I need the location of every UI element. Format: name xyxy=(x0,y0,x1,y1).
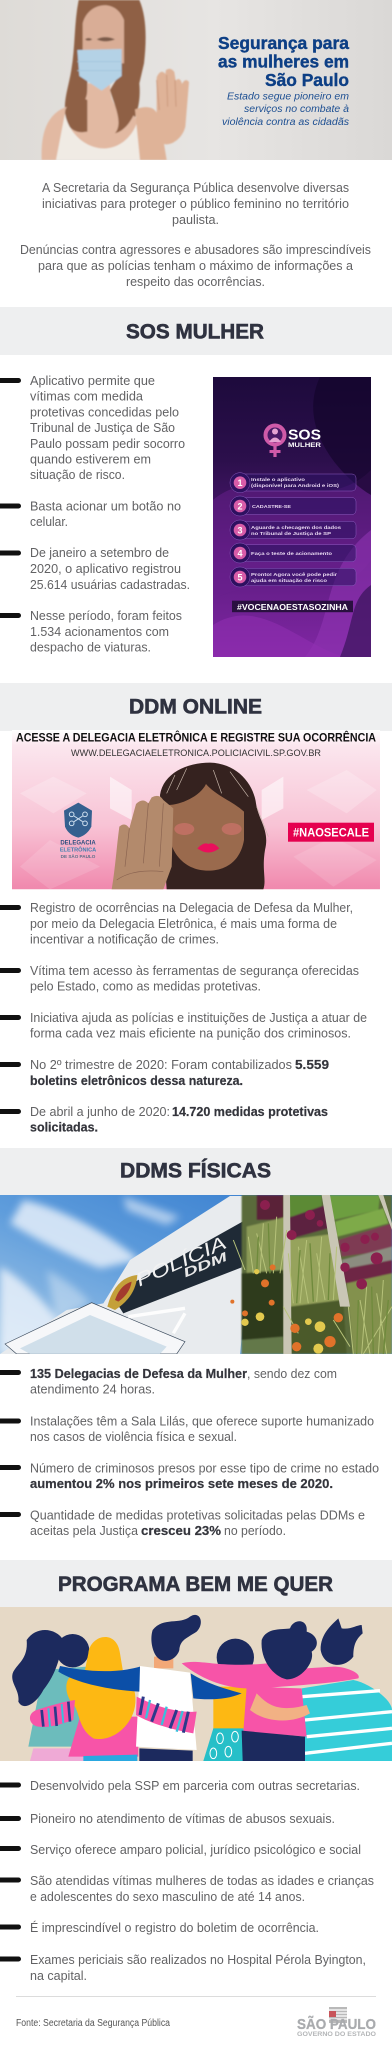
step 3 xyxy=(230,520,356,540)
bullet: registro xyxy=(0,901,353,946)
person 6 xyxy=(302,1618,392,1761)
bullet: exames: na capital. xyxy=(30,1969,87,1983)
banner logo text: ELETRÔNICA xyxy=(60,846,96,854)
bullet: pioneiro: Pioneiro no atendimento de vítimas de abusos sexuais. xyxy=(30,1812,335,1826)
bullet: atendidas: São atendidas vítimas mulheres de todas as idades e crianças xyxy=(30,1874,374,1888)
bullet: atendidas: e adolescentes do sexo masculino de até 14 anos. xyxy=(30,1890,305,1904)
bullet: 135 delegacias xyxy=(0,1367,337,1396)
bullet: medidas protetivas xyxy=(0,1508,365,1538)
photo: police station facade with green wall xyxy=(0,1195,392,1354)
bullet: botão: Basta acionar um botão no xyxy=(30,500,181,514)
banner URL: WWW.DELEGACIAELETRONICA.POLICIACIVIL.SP.GOV.BR xyxy=(71,748,321,758)
person 4 xyxy=(203,1639,254,1761)
DDM Online banner xyxy=(12,730,380,889)
hero subtitle: serviços no combate à xyxy=(244,104,349,115)
person 3 center xyxy=(136,1615,201,1761)
bullet: botão xyxy=(0,500,181,529)
bullet: vítima: pelo Estado, como as medidas protetivas. xyxy=(30,980,261,994)
bullet: aplicativo: protetivas concedidas pelo xyxy=(30,405,179,419)
bullet: acionamentos: 1.534 acionamentos com xyxy=(30,625,169,639)
bullet: acionamentos xyxy=(0,609,182,654)
step 4: Faça o teste de acionamento xyxy=(251,551,332,556)
bullet: medidas protetivas: 14.720 medidas protetivas xyxy=(172,1105,328,1119)
bullet: botão: celular. xyxy=(30,515,68,529)
bullet: sala lilás xyxy=(0,1414,374,1444)
intro text: Denúncias contra agressores e abusadores são imprescindíveis xyxy=(20,243,371,257)
bullet: registro: incentivar a notificação de crimes. xyxy=(30,932,219,946)
hashtag tag xyxy=(288,823,374,842)
person 2 xyxy=(56,1634,138,1761)
Programa Bem Me Quer bullet list xyxy=(0,1779,374,1983)
bullet: iniciativa: forma cada vez mais eficiente na punição dos criminosos. xyxy=(30,1027,351,1041)
step 3: Aguarde a checagem dos dados xyxy=(251,525,342,530)
bullet: medidas protetivas: aceitas pela Justiça xyxy=(30,1524,138,1538)
hero photo: woman with mask and raised hand xyxy=(0,0,392,160)
logo: São Paulo state government xyxy=(297,2007,376,2038)
intro text: respeito das ocorrências. xyxy=(126,275,265,289)
icon: SOS logo female symbol xyxy=(266,426,321,457)
bullet: 135 delegacias: atendimento 24 horas. xyxy=(30,1382,155,1396)
bullet: medidas protetivas: Quantidade de medidas protetivas solicitadas pelas DDMs e xyxy=(30,1508,365,1522)
step 2: CADASTRE-SE xyxy=(252,504,291,509)
logo: São Paulo state government: SÃO PAULO xyxy=(297,2015,376,2033)
bullet: medidas protetivas: no período. xyxy=(224,1524,286,1538)
intro text: A Secretaria da Segurança Pública desenvolve diversas xyxy=(42,181,349,195)
icon: SOS logo female symbol: MULHER xyxy=(288,442,321,449)
banner illustration: woman covering face xyxy=(12,730,380,889)
step 2: 2 xyxy=(237,501,243,511)
bullet: serviço: Serviço oferece amparo policial, jurídico psicológico e social xyxy=(30,1843,361,1857)
bullet: aplicativo: Paulo possam pedir socorro xyxy=(30,437,185,451)
person 5 body xyxy=(242,1687,307,1761)
section heading: SOS Mulher xyxy=(0,307,392,355)
bullet: iniciativa: Iniciativa ajuda as polícias e instituições de Justiça a atuar de xyxy=(30,1011,367,1025)
bullet: vítima: Vítima tem acesso às ferramentas de segurança oferecidas xyxy=(30,964,359,978)
bullet: 135 delegacias: , sendo dez com xyxy=(247,1367,337,1381)
bullet: desenvolvido: Desenvolvido pela SSP em parceria com outras secretarias. xyxy=(30,1779,360,1793)
bullet: medidas protetivas: cresceu 23% xyxy=(141,1524,221,1538)
bullet: exames xyxy=(0,1953,366,1983)
bullet: criminosos presos: aumentou 2% nos primeiros sete meses de 2020. xyxy=(30,1477,333,1491)
illustration: group of friends embracing xyxy=(0,1607,392,1761)
step 1: (disponível para Android e iOS) xyxy=(251,483,340,488)
bullet: aplicativo: quando estiverem em xyxy=(30,452,151,466)
icon: SOS logo female symbol: SOS xyxy=(288,428,321,444)
step 1: Instale o aplicativo xyxy=(251,477,305,482)
intro text xyxy=(20,181,371,289)
bullet: aplicativo: vítimas com medida xyxy=(30,390,143,404)
step 3: 3 xyxy=(237,525,243,535)
section heading: DDM Online: DDM ONLINE xyxy=(129,696,262,718)
bullet: medidas protetivas: De abril a junho de 2020: xyxy=(30,1105,170,1119)
step 5: 5 xyxy=(237,572,243,582)
source note: Fonte: Secretaria da Segurança Pública xyxy=(16,2018,170,2029)
bullet: iniciativa xyxy=(0,1011,367,1041)
hero banner xyxy=(0,0,392,160)
bullet: boletins: 5.559 xyxy=(295,1058,329,1072)
SOS Mulher bullet list xyxy=(0,374,190,654)
hero title: São Paulo xyxy=(265,70,349,90)
step 4 xyxy=(230,543,356,563)
step 3: no Tribunal de Justiça de SP xyxy=(251,531,331,536)
bullet: usuárias cadastradas: 25.614 usuárias cadastradas. xyxy=(30,578,190,592)
DDMs físicas bullet list xyxy=(0,1367,379,1538)
banner logo text xyxy=(60,840,96,859)
step 5 xyxy=(230,567,356,587)
step 5: ajuda em situação de risco xyxy=(251,578,327,583)
bullet: aplicativo: Tribunal de Justiça de São xyxy=(30,421,175,435)
section heading: DDMs físicas xyxy=(0,1148,392,1195)
section heading: DDM Online xyxy=(0,683,392,731)
hero subtitle: violência contra as cidadãs xyxy=(222,117,349,128)
hero title: Segurança para xyxy=(218,33,349,53)
bullet: boletim: É imprescindível o registro do boletim de ocorrência. xyxy=(30,1920,319,1935)
bullet: aplicativo xyxy=(0,374,185,482)
SOS Mulher app poster xyxy=(213,377,371,657)
section heading: Programa Bem Me Quer: PROGRAMA BEM ME QUER xyxy=(58,1573,333,1596)
bullet: medidas protetivas: solicitadas. xyxy=(30,1120,98,1134)
bullet: acionamentos: despacho de viaturas. xyxy=(30,640,151,654)
step 1: 1 xyxy=(237,478,243,488)
hero subtitle xyxy=(222,92,349,128)
hero subtitle: Estado segue pioneiro em xyxy=(227,92,349,102)
bullet: usuárias cadastradas: De janeiro a setembro de xyxy=(30,546,169,560)
bullet: sala lilás: Instalações têm a Sala Lilás, que oferece suporte humanizado xyxy=(30,1414,374,1428)
section heading: SOS Mulher: SOS MULHER xyxy=(126,320,264,344)
icon: flag xyxy=(329,2007,347,2023)
hashtag: #VOCENAOESTASOZINHA xyxy=(237,602,348,612)
photo: police station facade with green wall: DDM xyxy=(181,1250,230,1280)
hero title: as mulheres em xyxy=(218,52,349,72)
bullet: criminosos presos: Número de criminosos presos por esse tipo de crime no estado xyxy=(30,1462,379,1476)
intro text: paulista. xyxy=(172,213,219,227)
step 4: 4 xyxy=(237,548,243,558)
step 5: Pronto! Agora você pode pedir xyxy=(251,572,337,577)
bullet: usuárias cadastradas xyxy=(0,546,190,592)
banner logo text: DE SÃO PAULO xyxy=(61,853,96,859)
bullet: boletins: boletins eletrônicos dessa natureza. xyxy=(30,1074,243,1088)
section heading: Programa Bem Me Quer xyxy=(0,1560,392,1607)
bullet: criminosos presos xyxy=(0,1462,379,1491)
bullet: exames: Exames periciais são realizados no Hospital Pérola Byington, xyxy=(30,1953,366,1967)
step 2 xyxy=(230,496,356,516)
hashtag tag: #NAOSECALE xyxy=(293,828,369,840)
arms xyxy=(30,1662,359,1727)
bullet: medidas protetivas xyxy=(0,1105,328,1134)
bullet: registro: por meio da Delegacia Eletrônica, é mais uma forma de xyxy=(30,917,337,931)
bullet: sala lilás: nos casos de violência física e sexual. xyxy=(30,1430,237,1444)
step 1 xyxy=(230,473,356,493)
bullet: boletins xyxy=(0,1058,329,1088)
photo: police station facade with green wall: POLÍCIA xyxy=(132,1232,229,1290)
DDM Online bullet list xyxy=(0,901,367,1134)
bullet: atendidas xyxy=(0,1874,374,1904)
bullet: aplicativo: situação de risco. xyxy=(30,468,125,482)
bullet: aplicativo: Aplicativo permite que xyxy=(30,374,155,388)
banner logo text: DELEGACIA xyxy=(60,840,96,846)
logo: São Paulo state government: GOVERNO DO ESTADO xyxy=(297,2031,376,2038)
person 5 hair xyxy=(262,1621,317,1679)
bullet: vítima xyxy=(0,964,359,994)
bullet: boletins: No 2º trimestre de 2020: Foram contabilizados xyxy=(30,1058,292,1072)
bullet: usuárias cadastradas: 2020, o aplicativo registrou xyxy=(30,562,181,576)
hero title xyxy=(218,33,349,90)
person 1 xyxy=(12,1630,87,1761)
intro text: para que as polícias tenham o máximo de informações a xyxy=(38,259,353,273)
bullet: acionamentos: Nesse período, foram feitos xyxy=(30,609,182,623)
bullet: 135 delegacias: 135 Delegacias de Defesa da Mulher xyxy=(30,1367,247,1381)
section heading: DDMs físicas: DDMS FÍSICAS xyxy=(120,1160,271,1183)
bullet: registro: Registro de ocorrências na Delegacia de Defesa da Mulher, xyxy=(30,901,353,915)
intro text: iniciativas para proteger o público feminino no território xyxy=(42,197,349,211)
